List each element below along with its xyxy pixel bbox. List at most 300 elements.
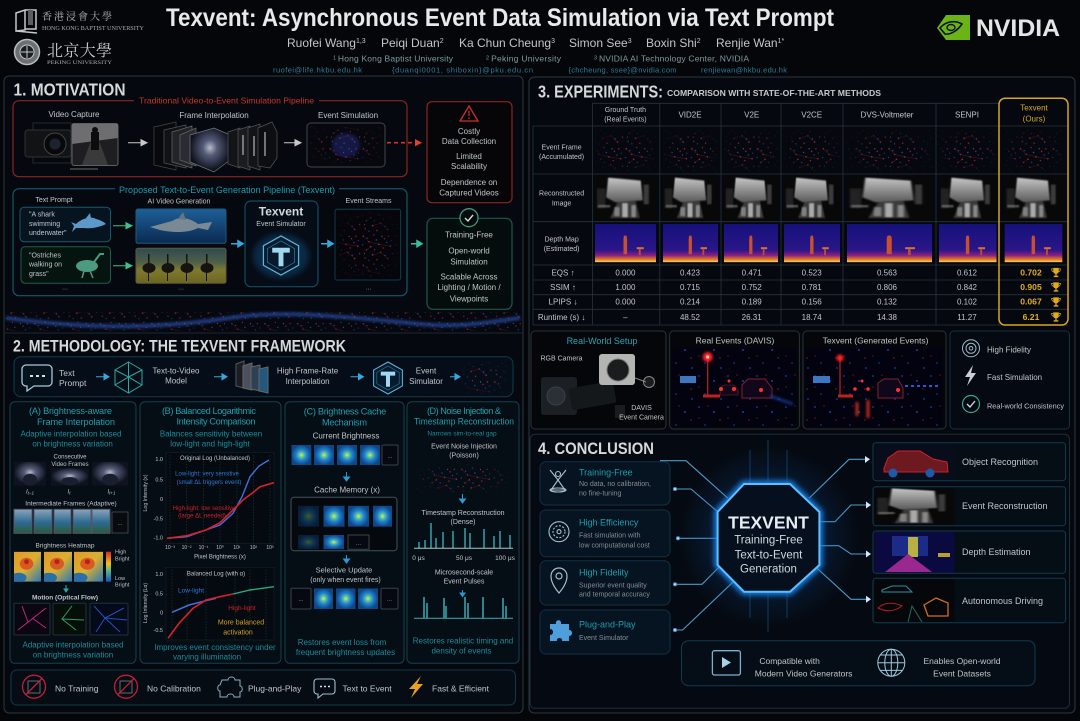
label	[152, 366, 200, 385]
metric values: 0.189	[742, 298, 762, 307]
icon: play	[712, 651, 740, 675]
card: training-free	[540, 462, 670, 505]
consecutive frames: Consecutive	[53, 454, 87, 460]
cache memory: ...	[356, 541, 361, 547]
affiliations: 3	[594, 56, 599, 62]
heading: experiments: 3. EXPERIMENTS:	[538, 81, 663, 101]
arrow	[231, 241, 243, 247]
panel: right column outer frame	[529, 77, 1075, 713]
arrows: prompt to video	[113, 223, 132, 269]
card: highlights: High Fidelity	[987, 346, 1031, 355]
card: training-free: Training-Free	[579, 467, 633, 477]
label: Model	[165, 376, 187, 385]
ellipses: ...	[366, 284, 371, 292]
image: real events	[672, 348, 796, 427]
heading: Frame Interpolation	[37, 417, 115, 427]
chart: balanced log: 0	[160, 610, 163, 616]
column headers: SENPI	[955, 111, 979, 120]
prompt: shark: "A shark	[29, 212, 55, 219]
row: event frames	[595, 130, 1062, 172]
callout: compatibility	[682, 641, 1035, 686]
column headers: (Real Events)	[604, 116, 647, 123]
heading: (C) Brightness Cache	[304, 407, 386, 417]
chart: original log: Original Log (Unbalanced)	[180, 456, 250, 462]
card: Texvent event simulator	[245, 201, 318, 287]
selective update: (only when event fires)	[310, 577, 381, 584]
panel: left column outer frame	[4, 76, 523, 713]
consecutive frames: I	[68, 489, 69, 495]
card: real-world setup	[531, 331, 666, 429]
consecutive frames: t+1	[109, 490, 116, 495]
heading: (A) Brightness-aware	[29, 406, 112, 416]
emails	[273, 66, 787, 74]
label: Event	[416, 366, 437, 375]
grid	[533, 103, 1068, 325]
chart: original log: 10¹	[233, 545, 241, 551]
chart: original log: (large ΔL needed)	[178, 514, 226, 520]
caption: Improves event consistency under	[154, 643, 276, 652]
label: High Frame-Rate	[277, 366, 339, 375]
heading	[29, 406, 115, 427]
label: Text Prompt	[35, 197, 73, 204]
card: high fidelity: High Fidelity	[579, 568, 629, 578]
card: high efficiency: Fast simulation with	[579, 532, 641, 539]
chart: original log: Low-light: very sensitive	[175, 472, 240, 478]
chart: original log: Pixel Brightness (x)	[194, 554, 246, 560]
step: event simulation: Event Simulation	[318, 111, 378, 120]
icon: neural cube	[115, 362, 142, 393]
chart: original log: 10⁰	[216, 545, 224, 551]
label	[409, 366, 443, 386]
callout: limitations: Limited	[456, 152, 482, 161]
prompt: ostrich: grass"	[29, 271, 49, 278]
column headers: (Ours)	[1023, 115, 1046, 124]
authors: 3	[628, 38, 632, 45]
row headers: LPIPS ↓	[549, 298, 577, 307]
ellipses	[62, 284, 371, 292]
card: generated events	[803, 331, 946, 429]
arrow	[344, 472, 350, 481]
affiliations: Peking University	[491, 54, 562, 64]
chart: pulses: Microsecond-scale	[435, 569, 493, 576]
card: plug-and-play: Plug-and-Play	[579, 620, 636, 630]
current brightness: Current Brightness	[313, 432, 379, 441]
chart: original log: 0	[160, 497, 163, 503]
consecutive frames: I	[26, 489, 28, 495]
metric values: 18.74	[802, 313, 822, 322]
callout: benefits: Open-world	[448, 246, 490, 255]
chart: original log: 10⁻³	[165, 545, 175, 551]
highlight column: Texvent: 6.21	[1023, 312, 1040, 322]
step: video capture	[25, 110, 118, 170]
arrow	[411, 241, 422, 247]
logo: Hong Kong Baptist University	[16, 10, 144, 33]
intermediate frames	[14, 501, 128, 533]
highlight column: Texvent	[999, 98, 1068, 325]
label: Prompt	[59, 378, 87, 388]
panel: experiments	[531, 81, 1070, 429]
arrow	[64, 585, 68, 592]
card: depth estimation	[873, 531, 1066, 573]
logo: Hong Kong Baptist University: 香港浸會大學	[42, 10, 112, 23]
logo: NVIDIA	[937, 15, 1060, 42]
metric values: –	[623, 313, 628, 322]
label: Simulator	[409, 377, 443, 386]
item: no calibration: No Calibration	[147, 684, 201, 694]
panel: proposed pipeline: Proposed Text-to-Event Generation Pipeline (Texvent)	[119, 185, 335, 195]
row headers: Depth Map	[544, 236, 579, 243]
arrow	[284, 140, 301, 146]
chart: original log: 10²	[250, 545, 257, 551]
heatmaps: Bright	[115, 583, 130, 589]
card: high fidelity	[540, 561, 670, 605]
arrow	[96, 374, 109, 380]
row headers: EQS ↑	[551, 268, 575, 277]
chart: original log: -1.0	[154, 535, 163, 541]
affiliations: 2	[486, 56, 491, 62]
column headers: V2CE	[801, 111, 822, 120]
subtitle	[160, 430, 262, 448]
row headers: Event Frame	[542, 144, 582, 151]
image: event streams	[335, 209, 401, 280]
callout: compatibility: Modern Video Generators	[755, 669, 852, 679]
metric values: 0.806	[877, 283, 898, 292]
intermediate frames: Intermediate Frames (Adaptive)	[25, 501, 117, 508]
metric values: 0.423	[680, 268, 701, 277]
consecutive frames: Video Frames	[51, 462, 89, 468]
subtitle: Adaptive interpolation based	[21, 430, 121, 439]
metric values: 0.752	[742, 283, 762, 292]
prompt: shark	[20, 207, 110, 242]
authors: Ka Chun Cheung	[459, 36, 551, 50]
optical flow	[14, 594, 128, 635]
selective update: ...	[387, 597, 392, 603]
panel: traditional pipeline	[13, 96, 422, 177]
metric values: 1.000	[615, 283, 636, 292]
arrow	[344, 555, 350, 563]
central octagon: TEXVENT: TEXVENT	[728, 512, 809, 532]
arrow	[214, 374, 227, 380]
noise injection: (Poisson)	[449, 452, 479, 459]
item: no training: No Training	[55, 684, 99, 694]
prompt: shark: underwater"	[29, 230, 67, 237]
heading: Intensity Comparison	[176, 417, 256, 427]
label: Text	[59, 368, 75, 378]
icon: check circle	[962, 396, 980, 412]
card: real events	[670, 331, 799, 429]
caption: frequent brightness updates	[296, 648, 395, 657]
row headers: (Accumulated)	[539, 154, 584, 161]
caption	[296, 638, 395, 657]
card: object recognition: Object Recognition	[962, 457, 1038, 467]
chart: original log	[143, 453, 274, 560]
decorative event wave band	[6, 312, 521, 331]
noise injection: Event Noise Injection	[431, 444, 497, 451]
selective update: ...	[298, 597, 304, 603]
card: high fidelity: and temporal accuracy	[579, 592, 650, 599]
affiliations	[333, 54, 749, 64]
callout: benefits	[427, 209, 512, 309]
chart: dense timestamps: 50 μs	[456, 555, 473, 562]
image: ostriches	[136, 248, 226, 283]
authors: 3	[551, 38, 555, 45]
chart: original log: 1.0	[155, 457, 163, 463]
authors: Ruofei Wang	[287, 36, 356, 50]
caption: on brightness variation	[33, 651, 113, 660]
panel A: frame interpolation	[10, 402, 136, 663]
heading	[304, 407, 386, 428]
panel: traditional pipeline: Traditional Video-to-Event Simulation Pipeline	[139, 96, 314, 106]
prompt: ostrich: walking on	[28, 262, 62, 269]
cache memory	[291, 485, 397, 551]
card: Texvent event simulator: Event Simulator	[256, 221, 306, 228]
card: high efficiency	[540, 510, 670, 557]
card: highlights	[950, 331, 1070, 429]
panel D: noise injection	[407, 402, 519, 663]
chart: balanced log: activation	[223, 629, 253, 636]
panel C: brightness cache	[285, 402, 404, 663]
item: fast and efficient	[409, 676, 490, 698]
metric values: 0.000	[615, 268, 636, 277]
card: high efficiency: High Efficiency	[579, 518, 639, 528]
row headers: Image	[552, 201, 571, 208]
authors: Boxin Shi	[646, 36, 697, 50]
heatmaps: Brightness Heatmap	[36, 543, 95, 550]
comparison table	[533, 98, 1068, 325]
chart: balanced log: 0.5	[155, 591, 163, 597]
highlight column: Texvent: 0.905	[1020, 282, 1042, 292]
selective update	[291, 566, 398, 609]
card: object recognition	[873, 443, 1066, 481]
card: training-free: no fine-tuning	[579, 491, 622, 498]
column headers: Texvent	[1020, 104, 1049, 113]
heading: experiments	[538, 81, 881, 101]
panel: motivation	[6, 80, 521, 331]
chart: balanced log: Log Intensity (Lα)	[143, 583, 149, 623]
callout: compatibility: Event Datasets	[933, 669, 991, 679]
image: shark	[136, 209, 226, 243]
chart: original log: Log Intensity (x)	[143, 474, 149, 511]
consecutive frames: I	[107, 489, 109, 495]
metric values: 14.38	[877, 313, 898, 322]
step: frame interpolation: Frame Interpolation	[179, 111, 249, 120]
image: event dots	[461, 362, 507, 394]
card: highlights: Fast Simulation	[987, 373, 1042, 382]
logo: Peking University: PEKING UNIVERSITY	[47, 60, 112, 66]
chart: dense timestamps: 0 μs	[412, 555, 425, 562]
card: high efficiency: low computational cost	[579, 542, 650, 549]
heading: (B) Balanced Logarithmic	[162, 406, 256, 416]
row: depth maps	[595, 224, 1062, 262]
prompt: ostrich	[21, 247, 110, 283]
heading	[162, 406, 256, 427]
chart: dense timestamps	[412, 510, 516, 562]
chart: balanced log: High-light	[228, 605, 256, 612]
heatmaps: High	[115, 550, 126, 556]
metric values: 0.781	[802, 283, 822, 292]
authors	[287, 36, 784, 50]
affiliations: 1	[333, 56, 338, 62]
metric values: 0.000	[615, 298, 636, 307]
noise injection	[416, 444, 510, 493]
column headers	[604, 104, 1049, 124]
arrow	[460, 494, 466, 503]
metric values: 0.214	[680, 298, 701, 307]
step: frame interpolation	[154, 111, 277, 172]
callout: compatibility: Enables Open-world	[923, 656, 1001, 666]
highlight column: Texvent: 0.067	[1020, 297, 1042, 307]
image: generated events	[806, 348, 943, 427]
chart: dense timestamps: Timestamp Reconstruction	[422, 510, 505, 517]
cache memory: Cache Memory (x)	[314, 485, 380, 494]
current brightness	[291, 432, 398, 465]
heading: motivation: 1. MOTIVATION	[14, 80, 126, 100]
callout: limitations: Costly	[458, 127, 480, 136]
label	[59, 368, 87, 388]
card: autonomous driving	[873, 578, 1066, 623]
connectors: right	[809, 456, 871, 603]
highlight column: Texvent: 0.702	[1020, 267, 1042, 277]
item: no calibration	[114, 675, 201, 698]
metric values: 0.715	[680, 283, 701, 292]
caption	[154, 643, 276, 661]
callout: benefits: Simulation	[450, 258, 488, 267]
authors: 1,3	[356, 38, 366, 45]
chart: pulses	[414, 569, 513, 618]
metric values: 0.132	[877, 298, 898, 307]
chart: original log: (small ΔL triggers event)	[177, 480, 241, 486]
ellipses: ...	[178, 284, 184, 292]
card: high fidelity: Superior event quality	[579, 582, 647, 589]
chart: balanced log: 1.0	[155, 572, 163, 578]
logo: Hong Kong Baptist University: HONG KONG BAPTIST UNIVERSITY	[42, 25, 144, 32]
arrow	[450, 374, 460, 380]
row headers	[538, 144, 585, 322]
heading: conclusion: 4. CONCLUSION	[538, 440, 654, 458]
card: plug-and-play: Event Simulator	[579, 635, 629, 642]
card: training-free: No data, no calibration,	[579, 481, 651, 488]
caption: Restores realistic timing and	[413, 636, 513, 645]
card: real-world setup: Real-World Setup	[567, 336, 637, 346]
chart: original log: -0.5	[154, 516, 163, 522]
header: title and authors	[14, 4, 1060, 74]
heading: experiments: COMPARISON WITH STATE-OF-THE-ART METHODS	[667, 88, 881, 98]
consecutive frames	[14, 454, 128, 495]
metric values: 0.842	[957, 283, 978, 292]
prompt: shark: swimming	[29, 221, 60, 228]
metric values: 0.612	[957, 268, 978, 277]
caption: Adaptive interpolation based	[23, 641, 123, 650]
icon: camera rig	[541, 354, 654, 418]
label: AI Video Generation	[148, 199, 211, 206]
callout: limitations	[427, 102, 512, 203]
caption: density of events	[431, 646, 492, 655]
label	[277, 366, 339, 386]
optical flow: Motion (Optical Flow)	[32, 594, 98, 601]
callout: limitations: Data Collection	[442, 137, 496, 146]
callout: benefits: Lighting / Motion /	[437, 283, 501, 292]
chart: balanced log: Balanced Log (with α)	[187, 571, 245, 577]
subtitle: Balances sensitivity between	[160, 430, 262, 439]
metric values: 48.52	[680, 313, 701, 322]
subtitle: Narrows sim-to-real gap	[427, 430, 497, 437]
item: plug and play	[218, 677, 302, 697]
step: event simulation	[307, 111, 385, 167]
arrow	[128, 140, 147, 146]
central octagon: TEXVENT: Text-to-Event	[735, 549, 803, 561]
column headers: VID2E	[678, 111, 702, 120]
card: depth estimation: Depth Estimation	[962, 547, 1031, 557]
title: Texvent: Asynchronous Event Data Simulation via Text Prompt	[166, 4, 835, 32]
heatmaps	[11, 543, 130, 589]
chart: original log: 10⁻²	[182, 545, 192, 551]
step: video capture: Video Capture	[48, 110, 100, 119]
chart: dense timestamps: 100 μs	[495, 555, 516, 562]
icon: bolt	[965, 365, 976, 386]
chart: original log: 0.5	[155, 477, 163, 483]
authors: 2	[440, 38, 444, 45]
chart: balanced log: -0.5	[154, 628, 163, 634]
card: generated events: Texvent (Generated Events)	[823, 335, 929, 345]
card: event reconstruction	[873, 487, 1066, 526]
authors: Peiqi Duan	[381, 36, 440, 50]
flow strip	[14, 357, 513, 397]
icon: globe	[878, 649, 905, 676]
chart: original log: High-light: low sensitive	[173, 506, 236, 512]
icon: target	[962, 340, 980, 357]
row headers: (Estimated)	[544, 246, 579, 253]
item: plug and play: Plug-and-Play	[248, 684, 302, 694]
caption	[413, 636, 513, 655]
arrow	[350, 374, 364, 380]
logo: Peking University: 北京大學	[47, 38, 112, 61]
item: text to event	[314, 679, 392, 698]
authors: Renjie Wan	[716, 36, 778, 50]
callout: benefits: Viewpoints	[450, 294, 488, 303]
heading	[414, 406, 514, 426]
column headers: Ground Truth	[605, 107, 646, 114]
ellipses: ...	[62, 284, 68, 292]
prompt: ostrich: "Ostriches	[29, 252, 62, 259]
chart: pulses: Event Pulses	[444, 578, 485, 585]
row headers: Reconstructed	[539, 191, 584, 198]
logo: NVIDIA: NVIDIA	[976, 15, 1060, 42]
divider	[5, 332, 522, 334]
chart: balanced log	[143, 567, 274, 640]
subtitle: on brightness variation	[32, 440, 113, 449]
callout: limitations: Dependence on	[441, 178, 497, 187]
card: Texvent event simulator: Texvent	[259, 205, 303, 219]
subtitle	[21, 430, 121, 449]
panel: methodology	[5, 333, 522, 705]
central octagon: TEXVENT: Generation	[740, 564, 797, 576]
card: real events: Real Events (DAVIS)	[696, 335, 775, 345]
callout: benefits: Scalable Across	[441, 272, 497, 281]
arrow	[321, 241, 333, 247]
callout: compatibility: Compatible with	[759, 656, 820, 666]
consecutive frames: t−1	[28, 490, 35, 495]
metric values: 0.471	[742, 268, 762, 277]
caption: varying illumination	[173, 652, 241, 661]
heatmaps: Low	[115, 576, 125, 582]
affiliations: Hong Kong Baptist University	[338, 54, 454, 64]
connectors: left	[660, 461, 733, 632]
emails: {duanqi0001, shiboxin}@pku.edu.cn	[392, 66, 533, 74]
row: reconstructed images	[595, 177, 1062, 220]
callout: benefits: Training-Free	[445, 230, 493, 239]
metric values: 0.156	[802, 298, 822, 307]
item: fast and efficient: Fast & Efficient	[432, 684, 490, 694]
